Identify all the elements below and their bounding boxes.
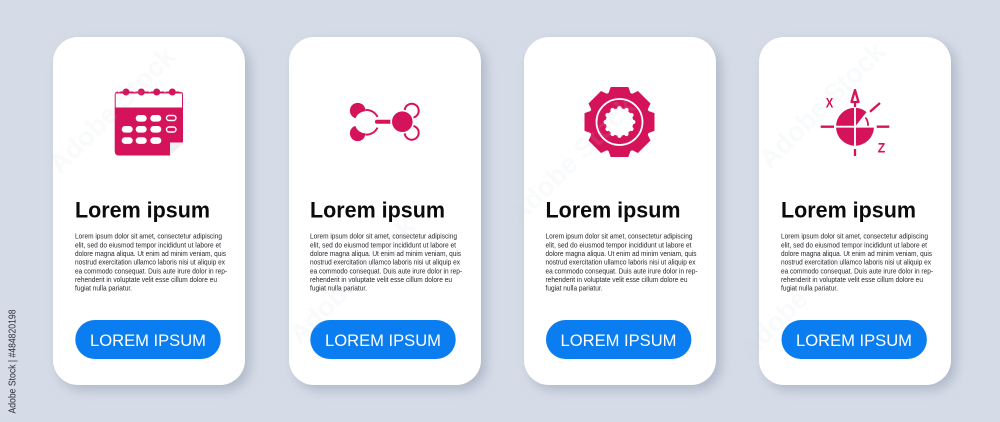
icon: axes and pie: X xyxy=(826,94,834,110)
panel: card 4 xyxy=(759,37,951,385)
card 3 background xyxy=(524,37,716,385)
heading: Lorem ipsum xyxy=(75,197,210,222)
panel: card 1 xyxy=(53,37,245,385)
body text: nostrud exercitation ullamco laboris nisi ut aliquip ex xyxy=(75,258,225,267)
icon: molecule xyxy=(350,103,419,141)
button xyxy=(782,320,927,359)
card 4 background xyxy=(759,37,951,385)
body text: dolore magna aliqua. Ut enim ad minim veniam, quis xyxy=(310,249,461,258)
body text xyxy=(310,232,462,292)
heading: Lorem ipsum xyxy=(781,197,916,222)
body text: rehenderit in voluptate velit esse cillum dolore eu xyxy=(75,275,217,284)
body text xyxy=(75,232,227,292)
icon: calendar xyxy=(115,88,184,156)
icon: axes and pie: Z xyxy=(878,139,886,155)
button xyxy=(75,320,221,359)
icon: gear xyxy=(585,88,654,156)
watermark: Adobe Stock xyxy=(503,91,642,229)
watermark: Adobe Stock xyxy=(753,36,892,174)
body text: Lorem ipsum dolor sit amet, consectetur adipiscing xyxy=(546,232,692,241)
body text: elit, sed do eiusmod tempor incididunt ut labore et xyxy=(310,240,457,249)
heading: Lorem ipsum xyxy=(310,197,445,222)
body text: ea commodo consequat. Duis aute irure dolor in rep- xyxy=(75,266,227,275)
body text: dolore magna aliqua. Ut enim ad minim veniam, quis xyxy=(781,249,932,258)
watermark: Adobe Stock xyxy=(283,211,422,349)
body text: elit, sed do eiusmod tempor incididunt ut labore et xyxy=(546,240,692,249)
body text: rehenderit in voluptate velit esse cillum dolore eu xyxy=(781,275,923,284)
body text: fugiat nulla pariatur. xyxy=(546,283,602,292)
body text: ea commodo consequat. Duis aute irure dolor in rep- xyxy=(546,266,698,275)
button: LOREM IPSUM xyxy=(560,331,676,350)
body text: dolore magna aliqua. Ut enim ad minim veniam, quis xyxy=(546,249,697,258)
side credit: Adobe Stock | #484820198 xyxy=(8,309,18,414)
heading: Lorem ipsum xyxy=(546,197,680,222)
button: LOREM IPSUM xyxy=(90,331,206,350)
panel: card 2 xyxy=(289,37,481,385)
body text: Lorem ipsum dolor sit amet, consectetur adipiscing xyxy=(75,232,222,241)
card 2 background xyxy=(289,37,481,385)
body text: fugiat nulla pariatur. xyxy=(75,283,132,292)
body text: nostrud exercitation ullamco laboris nisi ut aliquip ex xyxy=(310,258,460,267)
button: LOREM IPSUM xyxy=(325,331,441,350)
body text xyxy=(546,232,698,292)
body text: rehenderit in voluptate velit esse cillum dolore eu xyxy=(546,275,688,284)
body text: ea commodo consequat. Duis aute irure dolor in rep- xyxy=(781,266,933,275)
body text: Lorem ipsum dolor sit amet, consectetur adipiscing xyxy=(781,232,928,241)
watermark xyxy=(43,36,892,364)
body text xyxy=(781,232,933,292)
body text: nostrud exercitation ullamco laboris nisi ut aliquip ex xyxy=(546,258,696,267)
icon: axes and pie xyxy=(821,90,889,156)
watermark: Adobe Stock xyxy=(43,41,182,179)
body text: fugiat nulla pariatur. xyxy=(781,283,838,292)
body text: nostrud exercitation ullamco laboris nisi ut aliquip ex xyxy=(781,258,931,267)
button: LOREM IPSUM xyxy=(796,331,912,350)
panel: card 3 xyxy=(524,37,716,385)
body text: elit, sed do eiusmod tempor incididunt ut labore et xyxy=(781,240,928,249)
watermark: Adobe Stock xyxy=(733,226,872,364)
body text: fugiat nulla pariatur. xyxy=(310,283,367,292)
button xyxy=(310,320,456,359)
button xyxy=(546,320,691,359)
body text: dolore magna aliqua. Ut enim ad minim veniam, quis xyxy=(75,249,226,258)
body text: rehenderit in voluptate velit esse cillum dolore eu xyxy=(310,275,452,284)
card 1 background xyxy=(53,37,245,385)
body text: Lorem ipsum dolor sit amet, consectetur adipiscing xyxy=(310,232,457,241)
body text: ea commodo consequat. Duis aute irure dolor in rep- xyxy=(310,266,462,275)
body text: elit, sed do eiusmod tempor incididunt ut labore et xyxy=(75,240,222,249)
